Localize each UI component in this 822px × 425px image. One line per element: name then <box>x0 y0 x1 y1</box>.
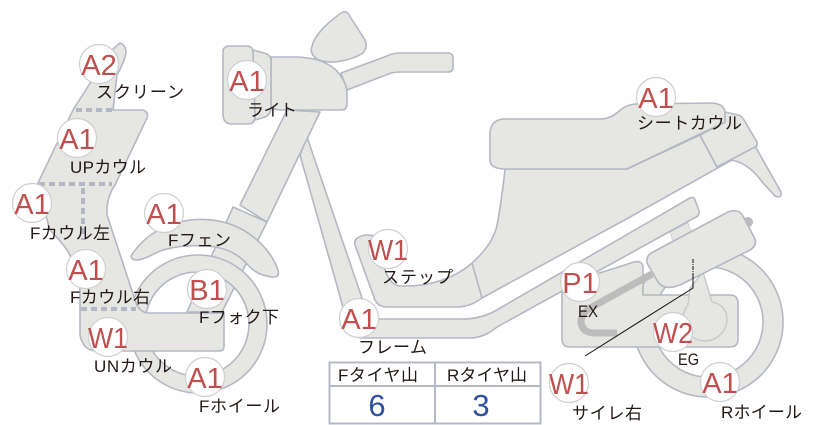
label: step: ステップ <box>382 268 453 287</box>
part: tail fin <box>730 146 781 197</box>
leader line dashed part <box>692 259 694 277</box>
label: front fork lower: Fフォク下 <box>199 308 279 327</box>
part: headlight unit <box>271 57 347 110</box>
part: battery box <box>647 211 755 287</box>
badge: W1 under cowl: W1 <box>88 323 128 355</box>
part: frame <box>352 197 699 338</box>
badge: A1 seat cowl: A1 <box>638 83 674 115</box>
label: engine: EG <box>678 350 699 369</box>
label: light: ライト <box>247 101 297 120</box>
label: front wheel: Fホイール <box>199 397 280 416</box>
part: light rim <box>253 50 271 120</box>
table: tire tread <box>329 362 541 424</box>
badge: A1 front fender: A1 <box>146 199 182 231</box>
step divider <box>472 135 717 298</box>
label: silencer right: サイレ右 <box>572 404 642 423</box>
part: exhaust pipe <box>581 274 652 333</box>
label: exhaust: EX <box>578 302 598 321</box>
value: rear tire: 3 <box>472 388 490 423</box>
part: tail cowl <box>700 112 757 167</box>
part: body and step <box>355 135 757 307</box>
label: front cowl left: Fカウル左 <box>30 224 110 243</box>
label: under cowl: UNカウル <box>94 357 172 376</box>
label: up cowl: UPカウル <box>70 158 146 177</box>
part: engine <box>562 262 738 347</box>
badge: A1 front cowl left: A1 <box>14 189 50 221</box>
badge: A1 front wheel: A1 <box>187 363 223 395</box>
label: seat cowl: シートカウル <box>637 114 742 133</box>
table header: rear tire: Rタイヤ山 <box>447 366 527 385</box>
badge: A2 screen: A2 <box>81 50 117 82</box>
part: light lens <box>223 46 255 124</box>
badge: A1 rear wheel: A1 <box>702 368 738 400</box>
badge: A1 up cowl: A1 <box>59 124 95 156</box>
part: rear wheel <box>633 247 783 397</box>
label: rear wheel: Rホイール <box>721 403 802 422</box>
part: lower fork <box>187 207 267 312</box>
part: exhaust knob <box>743 217 753 227</box>
leader line <box>585 277 693 356</box>
part: swing arm <box>683 272 727 341</box>
badge: B1 front fork lower: B1 <box>189 275 225 307</box>
part: handlebar <box>341 53 453 90</box>
badge: W1 step: W1 <box>368 235 408 267</box>
label: frame: フレーム <box>358 338 427 357</box>
badge: W1 silencer right: W1 <box>549 369 589 401</box>
label: front fender: Fフェン <box>168 231 231 250</box>
part: upper fork <box>240 110 320 222</box>
dotted seams <box>39 110 136 309</box>
badge: A1 light: A1 <box>229 66 265 98</box>
part: front fender <box>131 219 278 277</box>
part: windscreen top <box>311 12 366 62</box>
part: shock mount <box>670 223 693 247</box>
part: down tube <box>300 137 362 307</box>
badge: A1 frame: A1 <box>341 304 377 336</box>
badge: P1 exhaust: P1 <box>562 268 598 300</box>
part: front cowl, screen to under cowl <box>37 43 224 351</box>
badge: W2 engine: W2 <box>653 318 693 350</box>
table header: front tire: Fタイヤ山 <box>338 366 418 385</box>
label: front cowl right: Fカウル右 <box>70 288 150 307</box>
part: seat <box>490 103 725 169</box>
label: screen: スクリーン <box>96 83 184 102</box>
badge: A1 front cowl right: A1 <box>68 255 104 287</box>
value: front tire: 6 <box>368 388 386 423</box>
part: front wheel <box>129 255 267 393</box>
